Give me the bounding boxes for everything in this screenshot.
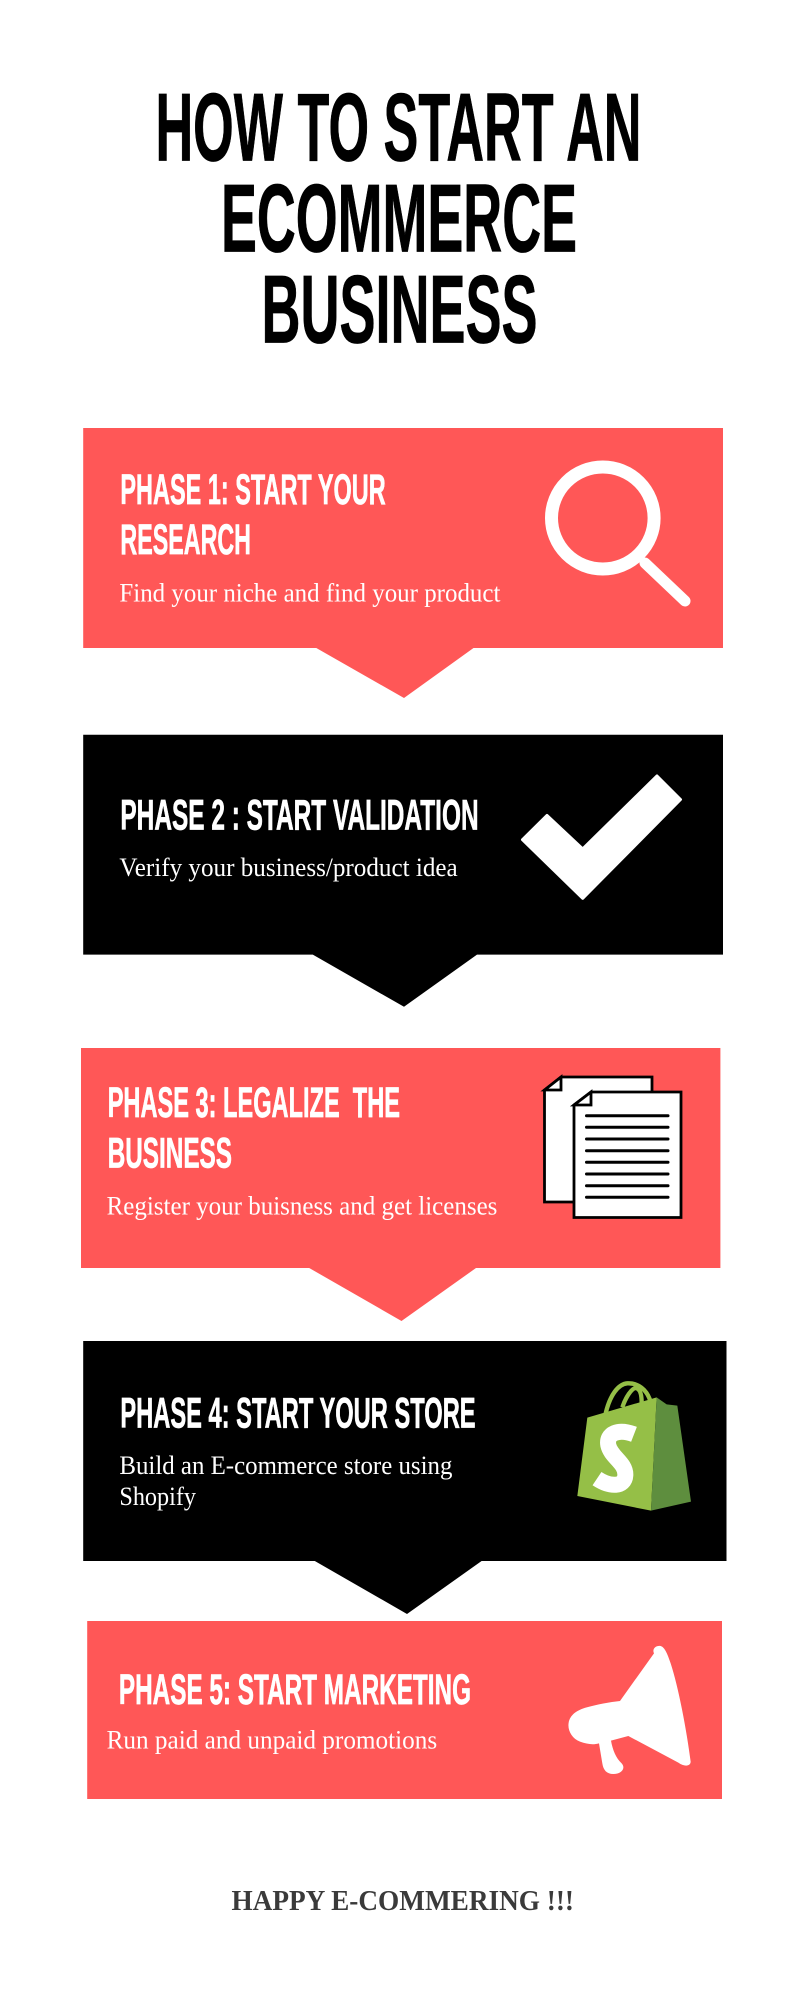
text: phase 5 description: Run paid and unpaid promotions: [107, 1726, 437, 1754]
heading: phase 3: [108, 1079, 400, 1178]
heading: phase 4: PHASE 4: START YOUR STORE: [120, 1390, 476, 1438]
panel shape: phase 3 arrow box: [81, 1048, 720, 1321]
panel shape: phase 4 arrow box: [83, 1341, 726, 1614]
icon: shopify bag: [577, 1383, 691, 1511]
heading: phase 2: PHASE 2 : START VALIDATION: [120, 791, 479, 839]
heading: phase 3: BUSINESS: [108, 1130, 232, 1178]
icon: documents: [544, 1077, 681, 1218]
panel shape: phase 5 box: [87, 1621, 722, 1799]
panel shape: phase 2 arrow box: [83, 735, 723, 1007]
title: [156, 75, 642, 364]
heading: phase 1: PHASE 1: START YOUR: [120, 466, 386, 514]
panel shape: phase 1 arrow box: [83, 428, 723, 698]
text: phase 3 description: Register your buisness and get licenses: [107, 1192, 497, 1220]
heading: phase 3: PHASE 3: LEGALIZE THE: [108, 1079, 400, 1127]
text: phase 4 description: Build an E-commerce store using: [119, 1451, 452, 1480]
heading: phase 1: [120, 466, 386, 564]
icon: magnifying glass: [552, 467, 685, 601]
text: phase 4 description: Shopify: [119, 1482, 196, 1511]
icon: megaphone: [568, 1646, 691, 1774]
title: BUSINESS: [262, 256, 538, 364]
text: phase 1 description: Find your niche and find your product: [119, 578, 501, 608]
panel: phase 5: [87, 1621, 722, 1799]
icon: check mark: [522, 776, 680, 898]
heading: phase 5: PHASE 5: START MARKETING: [119, 1666, 471, 1714]
footer text: HAPPY E-COMMERING !!!: [232, 1885, 574, 1917]
panel: phase 4: [83, 1341, 726, 1614]
panel: phase 2: [83, 735, 723, 1007]
text: phase 4 description: [119, 1451, 452, 1511]
panel: phase 1: [83, 428, 723, 698]
panel: phase 3: [81, 1048, 720, 1321]
heading: phase 1: RESEARCH: [120, 516, 251, 564]
text: phase 2 description: Verify your business/product idea: [119, 853, 458, 882]
